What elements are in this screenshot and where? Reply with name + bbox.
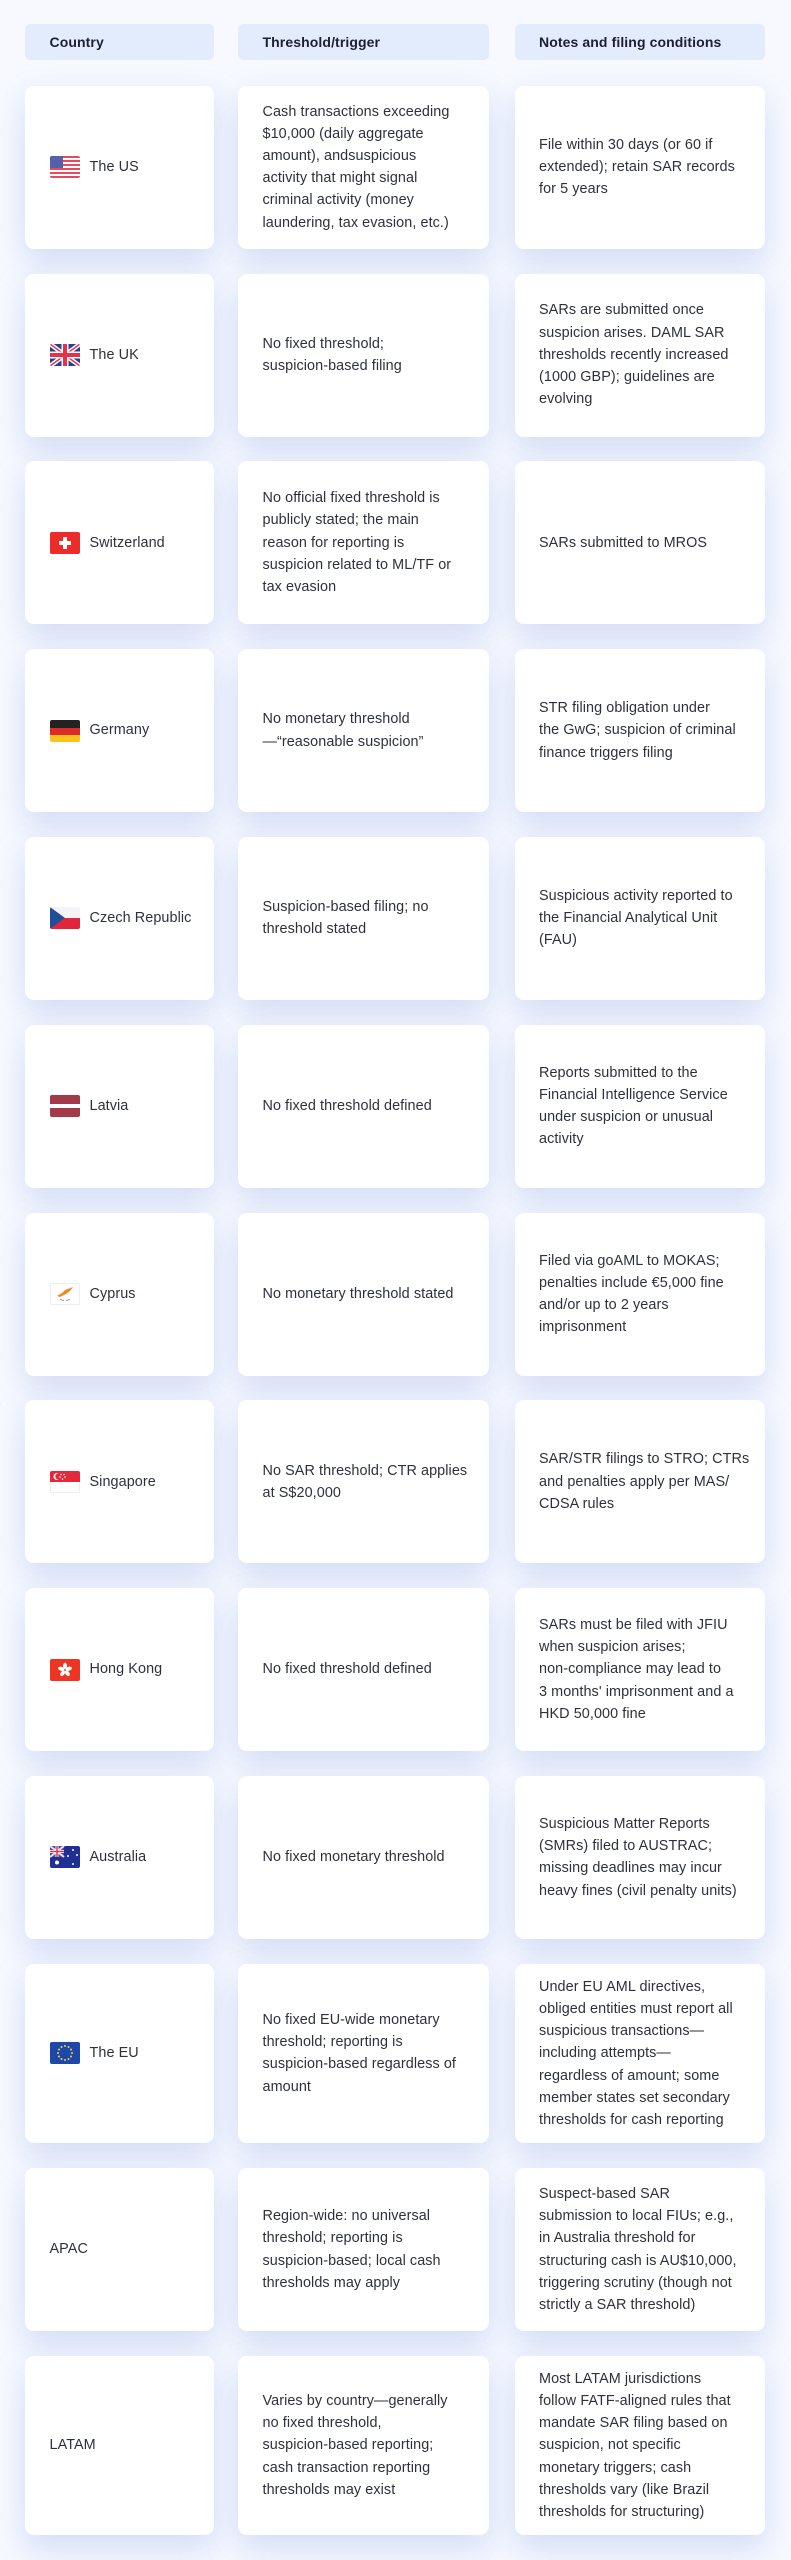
notes cell: mandate SAR filing based on <box>539 2415 728 2431</box>
threshold cell: suspicion related to ML/TF or <box>262 557 451 573</box>
threshold cell: No fixed threshold defined <box>262 1661 432 1677</box>
threshold cell: threshold; reporting is <box>262 2034 403 2050</box>
notes cell: (SMRs) filed to AUSTRAC; <box>539 1838 712 1854</box>
threshold cell: reason for reporting is <box>262 535 404 551</box>
notes cell: penalties include €5,000 fine <box>539 1275 724 1291</box>
notes cell: SARs submitted to MROS <box>539 535 707 551</box>
notes cell: and penalties apply per MAS/ <box>539 1474 729 1490</box>
threshold cell: activity that might signal <box>262 170 417 186</box>
notes cell: regardless of amount; some <box>539 2068 719 2084</box>
threshold cell: Suspicion-based filing; no <box>262 899 429 915</box>
notes cell: SAR/STR filings to STRO; CTRs <box>539 1451 749 1467</box>
threshold cell <box>238 1212 489 1376</box>
threshold cell <box>238 2356 489 2535</box>
threshold cell: threshold; reporting is <box>262 2230 403 2246</box>
icon: US flag <box>50 156 80 178</box>
notes cell: including attempts— <box>539 2045 671 2061</box>
threshold cell: tax evasion <box>262 579 336 595</box>
notes cell: HKD 50,000 fine <box>539 1706 646 1722</box>
threshold cell: thresholds may apply <box>262 2275 400 2291</box>
threshold cell: No fixed monetary threshold <box>262 1849 445 1865</box>
notes cell: member states set secondary <box>539 2090 730 2106</box>
threshold cell <box>238 1776 489 1939</box>
notes cell: Under EU AML directives, <box>539 1979 705 1995</box>
threshold cell: No SAR threshold; CTR applies <box>262 1463 467 1479</box>
country cell: Australia <box>25 1776 214 1939</box>
icon: Czech flag <box>50 907 80 929</box>
threshold cell <box>238 1400 489 1563</box>
notes cell: the Financial Analytical Unit <box>539 910 717 926</box>
header: Threshold/trigger: Threshold/trigger <box>262 34 380 50</box>
header: Notes and filing conditions <box>514 24 765 60</box>
notes cell: monetary triggers; cash <box>539 2460 691 2476</box>
notes cell: imprisonment <box>539 1319 626 1335</box>
icon: Hong Kong flag <box>50 1659 80 1681</box>
threshold cell <box>238 2168 489 2331</box>
notes cell: CDSA rules <box>539 1496 614 1512</box>
country cell: LATAM <box>25 2356 214 2535</box>
notes cell <box>514 274 765 436</box>
notes cell: Suspect-based SAR <box>539 2186 670 2202</box>
notes cell <box>514 649 765 812</box>
threshold cell: thresholds may exist <box>262 2482 395 2498</box>
row: Switzerland <box>11 461 779 649</box>
threshold cell: Varies by country—generally <box>262 2393 448 2409</box>
threshold cell: —“reasonable suspicion” <box>262 734 424 750</box>
country cell: Czech Republic <box>25 837 214 1000</box>
notes cell: SARs are submitted once <box>539 302 704 318</box>
notes cell: STR filing obligation under <box>539 700 710 716</box>
threshold cell: $10,000 (daily aggregate <box>262 126 424 142</box>
label: Singapore <box>90 1474 156 1490</box>
label: Latvia <box>90 1098 128 1114</box>
notes cell: non-compliance may lead to <box>539 1661 721 1677</box>
threshold cell: amount), andsuspicious <box>262 148 416 164</box>
notes cell: and/or up to 2 years <box>539 1297 669 1313</box>
threshold cell <box>238 837 489 1000</box>
notes cell: Suspicious Matter Reports <box>539 1816 710 1832</box>
notes cell: missing deadlines may incur <box>539 1860 722 1876</box>
header: Threshold/trigger <box>238 24 489 60</box>
threshold cell: No fixed EU-wide monetary <box>262 2012 440 2028</box>
label: Australia <box>90 1849 146 1865</box>
notes cell: (FAU) <box>539 932 577 948</box>
threshold cell <box>238 86 489 249</box>
label: Germany <box>90 722 149 738</box>
threshold cell: No fixed threshold defined <box>262 1098 432 1114</box>
label: Switzerland <box>90 535 165 551</box>
threshold cell <box>238 649 489 812</box>
notes cell: finance triggers filing <box>539 745 673 761</box>
threshold cell: suspicion-based regardless of <box>262 2056 456 2072</box>
label: The US <box>90 159 139 175</box>
row: Australia <box>11 1776 779 1964</box>
notes cell: Suspicious activity reported to <box>539 888 733 904</box>
threshold cell: cash transaction reporting <box>262 2460 430 2476</box>
notes cell: 3 months' imprisonment and a <box>539 1684 734 1700</box>
country cell: Switzerland <box>25 461 214 624</box>
row: Cyprus <box>11 1213 779 1400</box>
notes cell: triggering scrutiny (though not <box>539 2275 732 2291</box>
threshold cell <box>238 1025 489 1188</box>
notes cell: the GwG; suspicion of criminal <box>539 722 736 738</box>
notes cell: structuring cash is AU$10,000, <box>539 2252 737 2268</box>
notes cell <box>514 1025 765 1188</box>
notes cell <box>514 86 765 249</box>
notes cell: thresholds vary (like Brazil <box>539 2482 709 2498</box>
notes cell: heavy fines (civil penalty units) <box>539 1883 737 1899</box>
notes cell: evolving <box>539 391 592 407</box>
notes cell: Reports submitted to the <box>539 1065 698 1081</box>
notes cell: thresholds for cash reporting <box>539 2112 724 2128</box>
notes cell: when suspicion arises; <box>539 1639 686 1655</box>
threshold cell: threshold stated <box>262 921 366 937</box>
notes cell: File within 30 days (or 60 if <box>539 137 712 153</box>
notes cell <box>514 1400 765 1563</box>
row: The US <box>11 84 779 274</box>
country cell: Cyprus <box>25 1212 214 1376</box>
notes cell: strictly a SAR threshold) <box>539 2297 695 2313</box>
notes cell <box>514 837 765 1000</box>
notes cell: thresholds recently increased <box>539 347 728 363</box>
notes cell <box>514 1212 765 1376</box>
notes cell: Financial Intelligence Service <box>539 1087 728 1103</box>
notes cell: obliged entities must report all <box>539 2001 733 2017</box>
row: The EU <box>11 1964 779 2168</box>
country cell: Singapore <box>25 1400 214 1563</box>
notes cell: for 5 years <box>539 181 608 197</box>
icon: Singapore flag <box>50 1471 80 1493</box>
notes cell <box>514 2168 765 2331</box>
notes cell: thresholds for structuring) <box>539 2504 704 2520</box>
notes cell: activity <box>539 1131 584 1147</box>
threshold cell: Cash transactions exceeding <box>262 104 449 120</box>
row: Singapore <box>11 1400 779 1588</box>
row: Hong Kong <box>11 1588 779 1776</box>
notes cell <box>514 461 765 624</box>
icon: Australian flag <box>50 1846 80 1868</box>
label: Hong Kong <box>90 1661 162 1677</box>
notes cell: SARs must be filed with JFIU <box>539 1617 728 1633</box>
threshold cell: No official fixed threshold is <box>262 490 440 506</box>
header: Country: Country <box>50 34 104 50</box>
label: The UK <box>90 347 139 363</box>
country cell: Latvia <box>25 1025 214 1188</box>
threshold cell <box>238 1588 489 1751</box>
header: Country <box>25 24 214 60</box>
threshold cell: publicly stated; the main <box>262 512 419 528</box>
country cell: The EU <box>25 1964 214 2143</box>
icon: German flag <box>50 720 80 742</box>
country cell: APAC <box>25 2168 214 2331</box>
notes cell: suspicion arises. DAML SAR <box>539 325 724 341</box>
threshold cell: suspicion-based; local cash <box>262 2252 441 2268</box>
notes cell: suspicion, not specific <box>539 2437 681 2453</box>
icon: UK flag <box>50 344 80 366</box>
row: Czech Republic <box>11 837 779 1025</box>
row: LATAM <box>11 2356 779 2560</box>
threshold cell <box>238 274 489 436</box>
threshold cell <box>238 461 489 624</box>
threshold cell: No monetary threshold <box>262 711 410 727</box>
notes cell: Most LATAM jurisdictions <box>539 2371 701 2387</box>
threshold cell: no fixed threshold, <box>262 2415 382 2431</box>
icon: EU flag <box>50 2042 80 2064</box>
country cell: The US <box>25 86 214 249</box>
country cell: Hong Kong <box>25 1588 214 1751</box>
icon: Swiss flag <box>50 532 80 554</box>
threshold cell: No monetary threshold stated <box>262 1286 454 1302</box>
country cell: The UK <box>25 274 214 436</box>
country cell: APAC: APAC <box>50 2241 88 2257</box>
row: Germany <box>11 649 779 837</box>
notes cell <box>514 1588 765 1751</box>
notes cell: (1000 GBP); guidelines are <box>539 369 715 385</box>
threshold cell: at S$20,000 <box>262 1485 341 1501</box>
threshold cell: laundering, tax evasion, etc.) <box>262 215 449 231</box>
header: Notes and filing conditions: Notes and filing conditions <box>539 34 721 50</box>
notes cell: extended); retain SAR records <box>539 159 735 175</box>
notes cell: Filed via goAML to MOKAS; <box>539 1253 720 1269</box>
threshold cell: No fixed threshold; <box>262 336 384 352</box>
threshold cell: Region-wide: no universal <box>262 2208 430 2224</box>
threshold cell <box>238 1964 489 2143</box>
row: The UK <box>11 274 779 461</box>
notes cell <box>514 1776 765 1939</box>
notes cell <box>514 2356 765 2535</box>
icon: Cypriot flag <box>50 1283 80 1305</box>
label: The EU <box>90 2045 139 2061</box>
country cell: LATAM: LATAM <box>50 2437 96 2453</box>
label: Cyprus <box>90 1286 136 1302</box>
threshold cell: amount <box>262 2079 311 2095</box>
row: Latvia <box>11 1025 779 1213</box>
row: APAC <box>11 2168 779 2356</box>
notes cell: follow FATF-aligned rules that <box>539 2393 731 2409</box>
threshold cell: suspicion-based reporting; <box>262 2437 433 2453</box>
label: Czech Republic <box>90 910 191 926</box>
notes cell: submission to local FIUs; e.g., <box>539 2208 733 2224</box>
threshold cell: criminal activity (money <box>262 192 414 208</box>
threshold cell: suspicion-based filing <box>262 358 402 374</box>
notes cell: suspicious transactions— <box>539 2023 704 2039</box>
notes cell: under suspicion or unusual <box>539 1109 713 1125</box>
country cell: Germany <box>25 649 214 812</box>
notes cell <box>514 1964 765 2143</box>
notes cell: in Australia threshold for <box>539 2230 695 2246</box>
icon: Latvian flag <box>50 1095 80 1117</box>
